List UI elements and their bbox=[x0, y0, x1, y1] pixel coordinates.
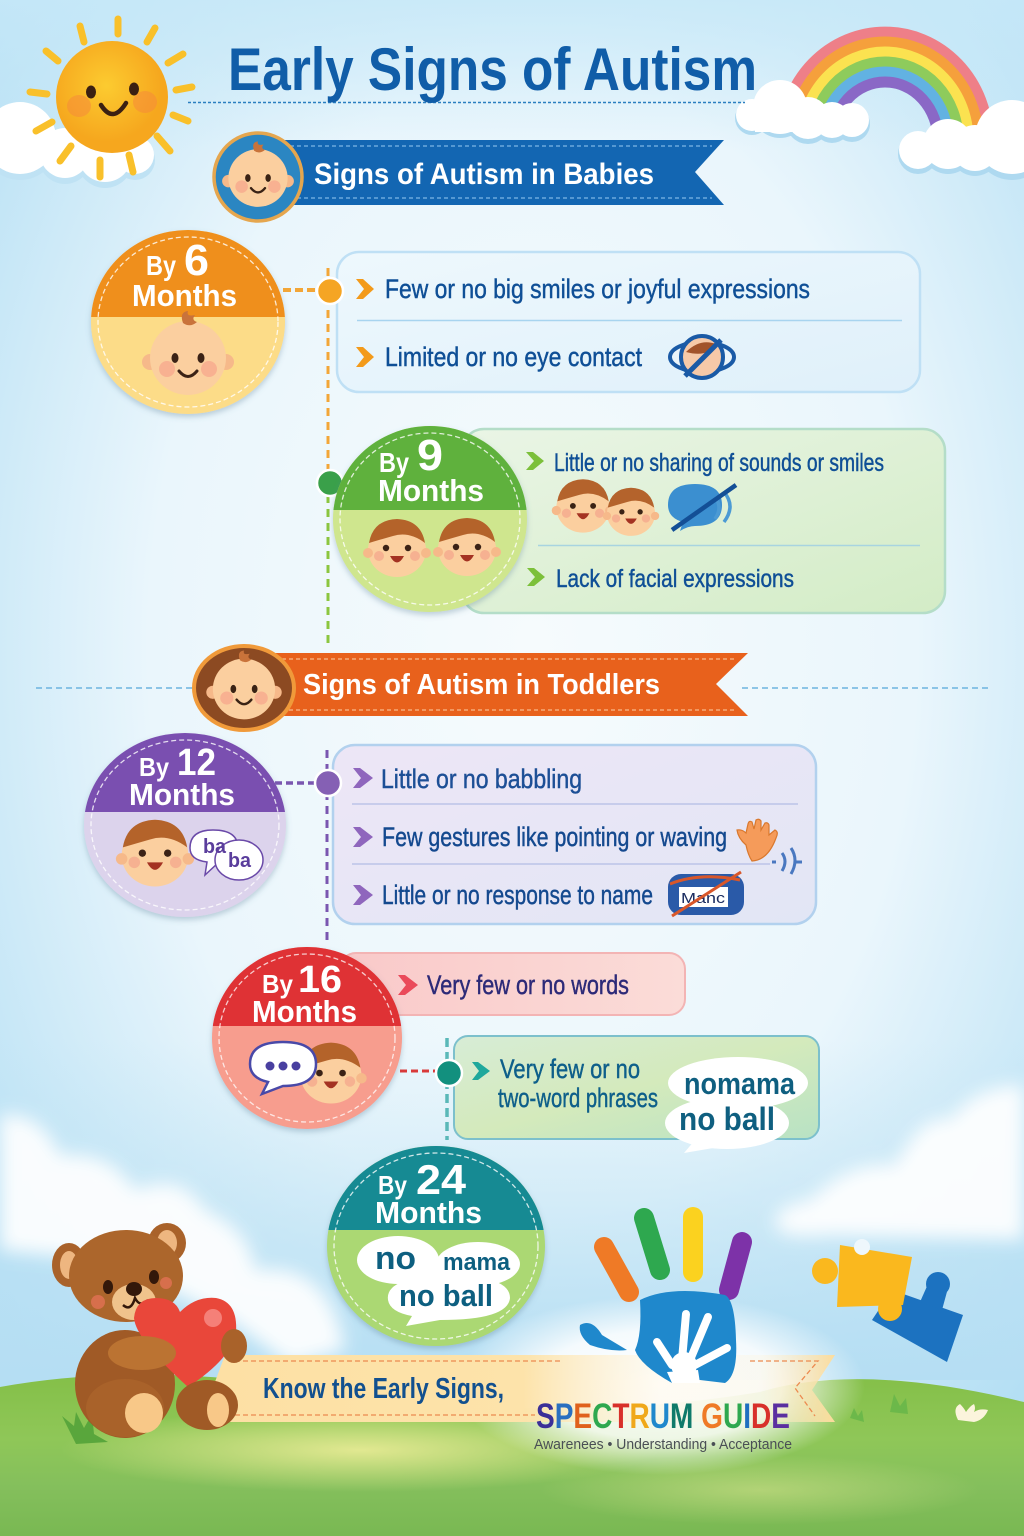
sun rays bbox=[30, 19, 192, 177]
icon: crossed-out name tag: Manc bbox=[681, 890, 726, 907]
babies banner: Signs of Autism in Babies bbox=[314, 158, 654, 191]
speech bubbles: no mama no ball: no bbox=[375, 1240, 416, 1276]
speech bubbles: ba ba: ba bbox=[203, 836, 227, 858]
bullet: babbling: Little or no babbling bbox=[381, 764, 582, 794]
badge: by 16 months bbox=[210, 945, 404, 1129]
small white hand bbox=[657, 1314, 727, 1383]
speech bubbles: ba ba bbox=[190, 830, 263, 880]
badge: by 12 months bbox=[82, 730, 288, 917]
footer ribbon: Know the Early Signs, bbox=[263, 1373, 504, 1405]
speech bubbles: no mama no ball bbox=[357, 1236, 520, 1326]
handprint logo bbox=[580, 1217, 742, 1383]
right rainbow cloud bbox=[898, 100, 1024, 180]
badge: by 16 months: Months bbox=[252, 994, 357, 1029]
badge: by 9 months: 9 bbox=[417, 431, 443, 480]
icon: two babies bbox=[552, 479, 659, 536]
speech bubbles: no mama no ball: mama bbox=[443, 1249, 511, 1276]
badge: by 24 months: By bbox=[378, 1170, 407, 1200]
badge: by 12 months: Months bbox=[129, 777, 235, 812]
bullet: response to name: Little or no response to name bbox=[382, 880, 653, 910]
icon: crossed-out name tag bbox=[668, 872, 744, 916]
badge: by 16 months: By bbox=[262, 969, 293, 999]
speech bubbles: ba ba: ba bbox=[228, 850, 252, 872]
section dividers bbox=[36, 687, 990, 689]
speech bubbles: no mama no ball: no ball bbox=[679, 1101, 775, 1137]
grass hill bbox=[0, 1295, 1024, 1536]
watercolor clouds lower right bbox=[775, 1085, 1024, 1240]
bullet: few smiles: Few or no big smiles or joyful expressions bbox=[385, 274, 810, 304]
timeline spine: 12 months bbox=[326, 750, 328, 945]
bullet: eye contact: Limited or no eye contact bbox=[385, 342, 642, 372]
bullet: gestures: Few gestures like pointing or waving bbox=[382, 822, 727, 852]
panel: by 12 months signs bbox=[333, 745, 816, 924]
speech bubbles: no mama no ball: no ball bbox=[399, 1278, 493, 1313]
icon: crossed-out speech bbox=[668, 484, 736, 531]
palm bbox=[635, 1291, 736, 1383]
panel: by 9 months signs bbox=[462, 429, 945, 613]
badge: by 6 months: By bbox=[146, 250, 176, 281]
heart bbox=[134, 1298, 236, 1387]
timeline spine: 6 to 9 months bbox=[326, 268, 330, 645]
blue puzzle piece bbox=[872, 1272, 963, 1362]
connector: 12 months bbox=[275, 770, 341, 796]
puzzle pieces bbox=[812, 1239, 963, 1362]
left rainbow cloud bbox=[735, 80, 870, 144]
title: Early Signs of Autism bbox=[228, 36, 757, 103]
speech bubble: dots bbox=[250, 1042, 316, 1094]
teddy bear with heart bbox=[52, 1223, 247, 1438]
sun with cloud bbox=[0, 19, 192, 188]
icon: toddler badge bbox=[194, 646, 294, 730]
rainbow with clouds bbox=[735, 32, 1024, 180]
panel: by 16 months two-word phrases bbox=[447, 1036, 819, 1153]
speech bubbles: no mama no ball: nomama bbox=[684, 1066, 796, 1101]
badge: by 9 months: Months bbox=[378, 473, 484, 508]
cloud behind sun bbox=[0, 102, 155, 188]
toddlers banner bbox=[194, 646, 748, 730]
toddlers banner: Signs of Autism in Toddlers bbox=[303, 669, 660, 701]
watercolor clouds lower left bbox=[0, 1114, 345, 1365]
spectrum guide wordmark bbox=[534, 1397, 792, 1453]
yellow puzzle piece bbox=[812, 1239, 912, 1321]
badge: by 12 months: By bbox=[139, 752, 169, 782]
icon: crossed-out eye bbox=[670, 336, 734, 378]
badge: by 24 months bbox=[325, 1144, 547, 1346]
badge: by 24 months: 24 bbox=[416, 1156, 467, 1203]
icon: baby badge bbox=[214, 133, 302, 221]
connector node: 9 months bbox=[317, 470, 343, 496]
icon: waving hand bbox=[737, 819, 802, 874]
finger prints bbox=[604, 1217, 742, 1292]
bullet: facial expressions: Lack of facial expressions bbox=[556, 565, 794, 593]
badge: by 6 months: Months bbox=[132, 278, 237, 313]
connector: 16 months bbox=[400, 1060, 462, 1086]
babies banner bbox=[214, 133, 724, 221]
panel: by 16 months few words bbox=[340, 953, 685, 1015]
spectrum guide wordmark: SPECTRUM GUIDE bbox=[536, 1397, 790, 1436]
panel: by 6 months signs bbox=[337, 252, 920, 392]
panel: by 16 months two-word phrases: two-word phrases bbox=[498, 1083, 658, 1113]
connector: 6 months bbox=[283, 278, 343, 304]
bullet: sharing: Little or no sharing of sounds or smiles bbox=[554, 449, 884, 477]
badge: by 9 months: By bbox=[379, 447, 409, 478]
badge: by 9 months bbox=[330, 424, 530, 612]
speech bubbles: no mama no ball bbox=[665, 1057, 808, 1153]
panel: by 16 months few words: Very few or no words bbox=[427, 970, 629, 1000]
badge: by 16 months: 16 bbox=[298, 959, 342, 1001]
badge: by 24 months: Months bbox=[375, 1195, 482, 1230]
panel: by 16 months two-word phrases: Very few or no bbox=[500, 1054, 640, 1084]
badge: by 6 months: 6 bbox=[184, 236, 209, 285]
badge: by 12 months: 12 bbox=[177, 742, 216, 784]
spectrum guide wordmark: Awarenees • Understanding • Acceptance bbox=[534, 1436, 792, 1453]
footer ribbon bbox=[212, 1355, 835, 1422]
badge: by 6 months bbox=[88, 225, 288, 414]
sun face bbox=[56, 41, 168, 153]
